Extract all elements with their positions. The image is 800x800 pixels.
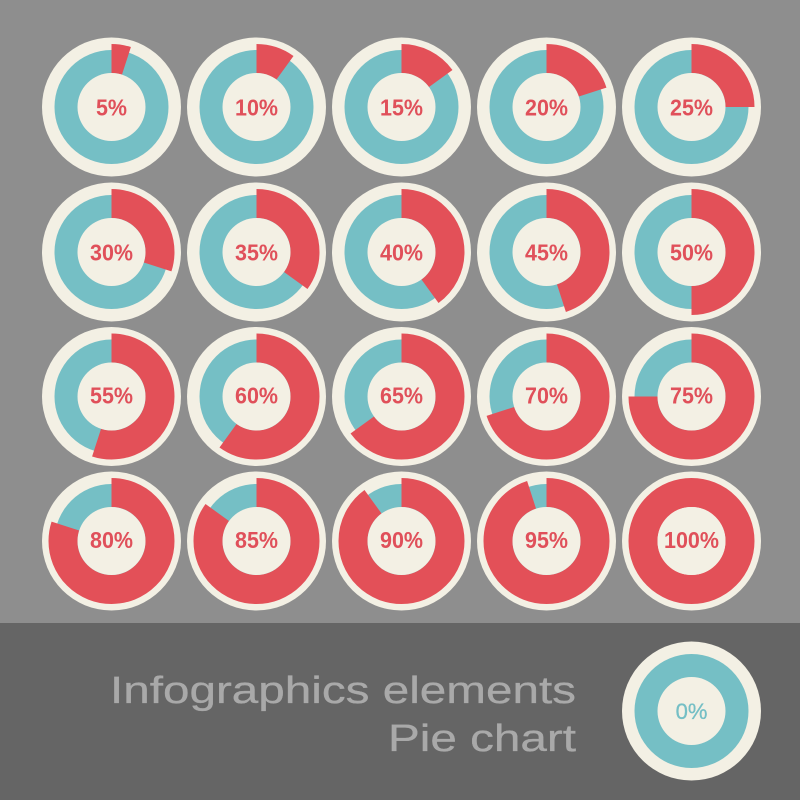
pie chart 100% xyxy=(622,472,761,610)
pie chart 10% xyxy=(187,38,326,176)
pie chart 40% xyxy=(332,182,471,322)
pie chart 75%: 75% xyxy=(670,383,713,409)
pie chart 40%: 40% xyxy=(380,240,423,266)
pie chart 55% xyxy=(42,327,181,466)
pie chart 85%: 85% xyxy=(235,527,278,553)
pie chart 85% xyxy=(187,472,326,610)
pie chart 90%: 90% xyxy=(380,527,423,553)
pie chart 70% xyxy=(477,327,616,466)
pie chart 90% xyxy=(332,472,471,610)
pie chart 20%: 20% xyxy=(525,95,568,121)
pie chart 70%: 70% xyxy=(525,383,568,409)
pie chart 95%: 95% xyxy=(525,527,568,553)
pie chart 5% xyxy=(42,38,181,176)
pie chart 50% xyxy=(622,182,761,322)
subtitle: Pie chart: Pie chart xyxy=(388,718,577,760)
pie chart 30% xyxy=(42,182,181,322)
pie chart 75% xyxy=(622,327,761,466)
pie chart 35%: 35% xyxy=(235,240,278,266)
pie chart 50%: 50% xyxy=(670,240,713,266)
pie chart 15% xyxy=(332,38,471,176)
pie chart 5%: 5% xyxy=(96,95,127,121)
pie chart 65%: 65% xyxy=(380,383,423,409)
pie chart 65% xyxy=(332,327,471,466)
pie chart 95% xyxy=(477,472,616,610)
pie chart 25% xyxy=(622,38,761,176)
pie chart 35% xyxy=(187,182,326,322)
pie chart 0% xyxy=(622,642,761,780)
footer band xyxy=(0,623,800,800)
pie chart 30%: 30% xyxy=(90,240,133,266)
pie chart 25%: 25% xyxy=(670,95,713,121)
pie chart 55%: 55% xyxy=(90,383,133,409)
pie chart 60%: 60% xyxy=(235,383,278,409)
title: Infographics elements: Infographics elements xyxy=(110,670,576,712)
pie chart 80% xyxy=(42,472,181,610)
pie chart 45% xyxy=(477,182,616,322)
pie chart 20% xyxy=(477,38,616,176)
pie chart 15%: 15% xyxy=(380,95,423,121)
pie chart 45%: 45% xyxy=(525,240,568,266)
pie chart 80%: 80% xyxy=(90,527,133,553)
pie chart 10%: 10% xyxy=(235,95,278,121)
pie chart 100%: 100% xyxy=(664,527,719,553)
pie chart 0%: 0% xyxy=(676,699,707,724)
pie chart 60% xyxy=(187,327,326,466)
